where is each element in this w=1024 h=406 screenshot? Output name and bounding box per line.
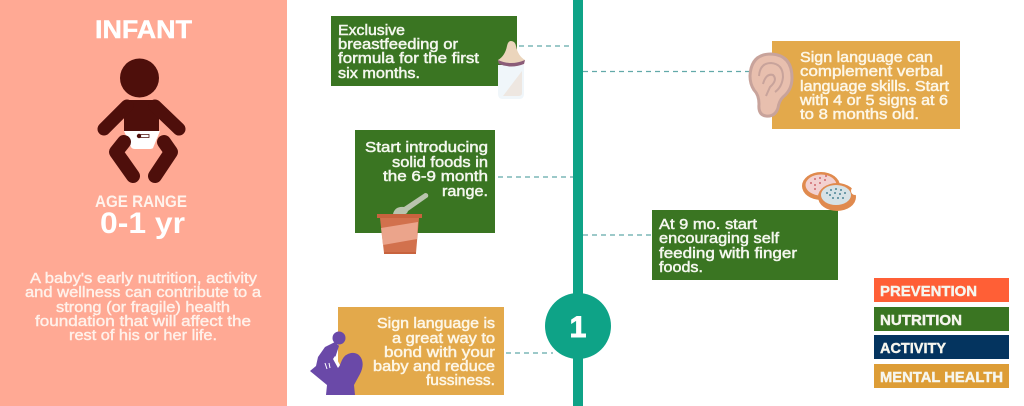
card text: to 8 months old. [800,106,919,123]
legend item: prevention: PREVENTION [880,284,977,300]
connector: sign language [583,70,750,72]
icon: baby bottle [498,41,525,99]
value: 0-1 yr: 0-1 yr [100,207,185,240]
card text: range. [442,183,488,200]
connector: breastfeeding [519,45,573,47]
card text [659,216,797,276]
card: finger foods [652,172,859,280]
connector: bonding [506,352,553,354]
legend item: mental health: MENTAL HEALTH [880,370,1003,386]
card text [373,315,495,389]
card text: Start introducing [365,139,488,156]
heading: infant: INFANT [95,16,192,44]
card text: the 6-9 month [383,168,488,185]
timeline bar [573,0,583,406]
card text: baby and reduce [373,358,495,375]
card text: formula for the first [338,50,480,67]
card text: language skills. Start [800,78,950,95]
icon: cookies [802,172,859,211]
card text: with 4 or 5 signs at 6 [799,92,948,109]
legend item: activity: ACTIVITY [880,341,946,357]
card text: Sign language can [800,49,933,66]
card text: Exclusive [338,22,405,39]
text block: description: and wellness can contribute to a [25,285,262,301]
card: solid foods [355,130,495,254]
text block: description: strong (or fragile) health [56,300,230,316]
icon: ear [750,54,792,116]
card text [799,49,950,123]
legend item: nutrition: NUTRITION [880,313,962,329]
card: sign language skills [750,41,960,129]
connector: solid foods [498,176,573,178]
card text: breastfeeding or [338,36,458,53]
card text: solid foods in [392,154,488,171]
card text: encouraging self [659,230,780,247]
card text: Sign language is [377,315,495,332]
timeline marker: 1: 1 [570,311,586,344]
card: bonding [310,307,504,395]
text block: description: foundation that will affect the [35,314,251,330]
icon: yogurt cup with spoon [377,193,428,254]
icon: baby [104,58,179,176]
connector: finger foods [583,234,652,236]
text block: description: A baby's early nutrition, activity [30,271,258,287]
card text [365,139,488,200]
card text: foods. [659,259,703,276]
panel: infant summary [0,0,287,406]
legend [874,278,1009,388]
card text: a great way to [392,330,495,347]
card text: feeding with finger [659,245,797,262]
timeline marker: 1 [545,293,611,359]
card text: At 9 mo. start [659,216,758,233]
text block: description [25,271,262,344]
icon: parent lifting baby [310,332,363,395]
card text [338,22,480,82]
card text: bond with your [384,344,495,361]
text block: description: rest of his or her life. [69,328,217,344]
card: breastfeeding [331,16,525,99]
card text: six months. [338,65,420,82]
label: age range: AGE RANGE [95,193,187,211]
card text: fussiness. [426,372,495,389]
card text: complement verbal [800,63,943,80]
